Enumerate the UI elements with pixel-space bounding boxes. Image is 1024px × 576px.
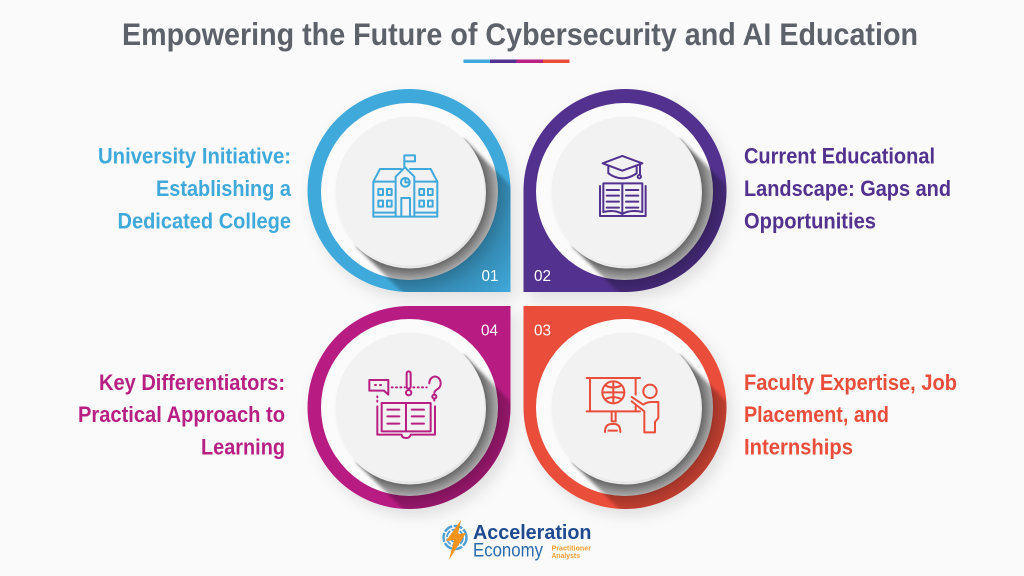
logo: Acceleration Economy: Practitioner bbox=[552, 544, 591, 553]
icon: graduation cap and book bbox=[600, 156, 646, 216]
logo text: Acceleration bbox=[473, 521, 592, 544]
heading: Faculty Expertise: Placement, and bbox=[744, 402, 889, 427]
teardrop 02 bbox=[524, 89, 726, 292]
heading: Faculty Expertise: Internships bbox=[744, 434, 853, 460]
icon: open book with question marks bbox=[369, 371, 441, 438]
number 02: 02 bbox=[534, 268, 551, 285]
disc 04 bbox=[334, 332, 486, 484]
white ring 01 bbox=[321, 103, 498, 280]
icon: teacher at board bbox=[587, 378, 658, 432]
heading: Key Differentiators: Learning bbox=[201, 434, 285, 460]
heading: University Initiative bbox=[98, 143, 292, 233]
white ring 04 bbox=[321, 319, 498, 496]
logo: Acceleration Economy: Economy bbox=[473, 540, 543, 562]
heading: Key Differentiators: Practical Approach to bbox=[78, 402, 285, 427]
heading: University Initiative: Establishing a bbox=[156, 176, 292, 201]
teardrop 04 bbox=[308, 306, 511, 509]
heading: Faculty Expertise bbox=[744, 370, 957, 460]
number 04: 04 bbox=[481, 322, 498, 340]
heading: Current Educational Landscape: Current Educational bbox=[744, 143, 935, 168]
heading: University Initiative: University Initiative: bbox=[98, 143, 291, 168]
heading: Current Educational Landscape bbox=[744, 143, 951, 233]
heading: Key Differentiators: Key Differentiators: bbox=[99, 370, 285, 395]
number 01: 01 bbox=[482, 268, 498, 285]
logo: Acceleration Economy bbox=[444, 520, 592, 562]
white ring 03 bbox=[536, 319, 713, 496]
heading: Key Differentiators bbox=[78, 370, 285, 460]
number 03: 03 bbox=[534, 322, 551, 340]
long shadow 04 bbox=[354, 353, 510, 509]
title underline bbox=[464, 60, 570, 63]
heading: Current Educational Landscape: Opportunities bbox=[744, 208, 876, 233]
heading: University Initiative: Dedicated College bbox=[118, 208, 291, 233]
disc 01 bbox=[334, 116, 486, 268]
heading: Current Educational Landscape: Landscape: Gaps and bbox=[744, 176, 951, 201]
panel: 01 university initiative bbox=[308, 89, 518, 302]
icon: school building bbox=[373, 155, 437, 217]
long shadow 01 bbox=[354, 137, 510, 292]
title: Empowering the Future of Cybersecurity and AI Education bbox=[122, 16, 918, 52]
panel: 03 faculty expertise bbox=[524, 306, 734, 519]
panel: 02 current educational landscape bbox=[524, 89, 734, 302]
long shadow 02 bbox=[570, 137, 726, 292]
panel: 04 key differentiators bbox=[308, 306, 518, 519]
white ring 02 bbox=[536, 103, 713, 280]
long shadow 03 bbox=[570, 353, 726, 509]
heading: Faculty Expertise: Faculty Expertise, Job bbox=[744, 370, 957, 395]
teardrop 01 bbox=[308, 89, 510, 292]
disc 03 bbox=[550, 332, 702, 484]
icon: fingerprint with lightning bolt bbox=[444, 520, 466, 560]
logo: Acceleration Economy: Analysts bbox=[552, 551, 580, 560]
teardrop 03 bbox=[523, 306, 726, 509]
disc 02 bbox=[550, 116, 702, 268]
